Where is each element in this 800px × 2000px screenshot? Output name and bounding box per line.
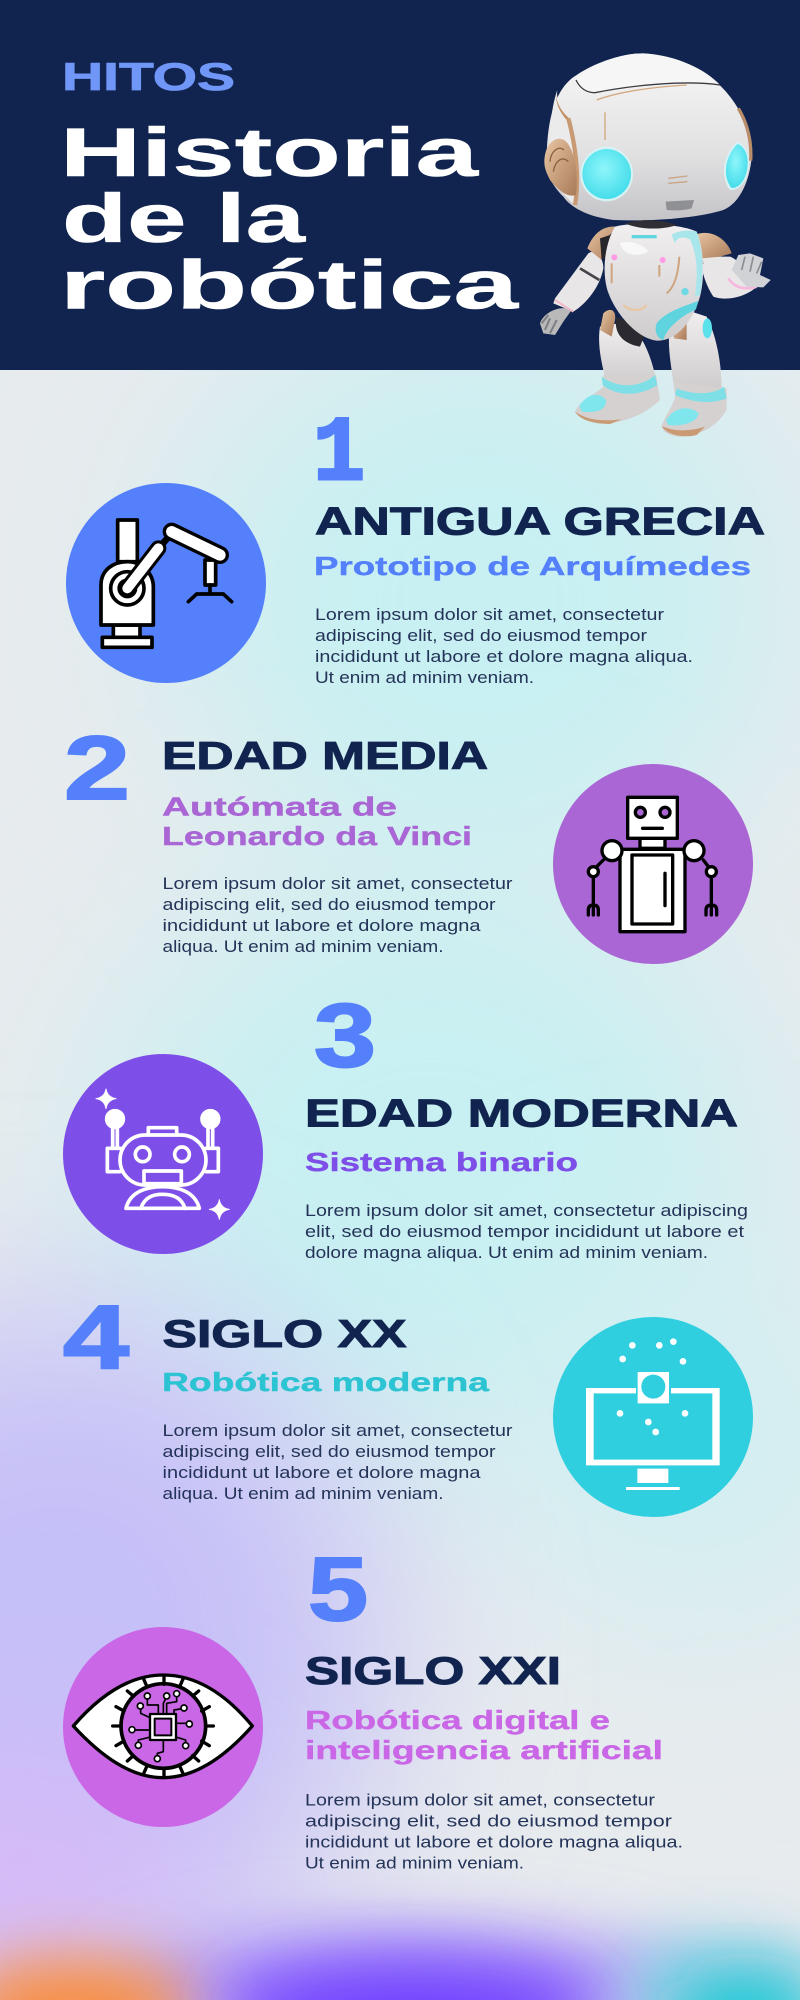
- section 5: Siglo XXI: [63, 1540, 683, 1872]
- body text: Ut enim ad minim veniam.: [305, 1854, 524, 1872]
- body text: incididunt ut labore et dolore magna: [162, 1464, 481, 1482]
- subheading: Robótica digital e: [305, 1705, 610, 1735]
- subheading: Prototipo de Arquímedes: [314, 551, 751, 581]
- subheading: inteligencia artificial: [305, 1735, 663, 1765]
- main title: [60, 114, 519, 324]
- number 4: 4: [63, 1288, 129, 1388]
- body text: dolore magna aliqua. Ut enim ad minim veniam.: [305, 1244, 708, 1262]
- main title: de la: [62, 180, 306, 257]
- heading: EDAD MEDIA: [162, 735, 488, 778]
- section 4: Siglo XX: [63, 1288, 753, 1517]
- body text: [305, 1202, 748, 1262]
- body text: incididunt ut labore et dolore magna: [162, 917, 481, 935]
- subheading: Sistema binario: [305, 1147, 578, 1177]
- body text: Ut enim ad minim veniam.: [315, 669, 534, 687]
- heading: SIGLO XX: [162, 1313, 406, 1356]
- number 1: 1: [313, 402, 365, 507]
- icon: robot with arms: [553, 764, 753, 964]
- body text: adipiscing elit, sed do eiusmod tempor: [162, 896, 496, 914]
- header eyebrow: HITOS: [62, 56, 235, 99]
- icon: eye with circuit: [63, 1627, 263, 1827]
- body text: Lorem ipsum dolor sit amet, consectetur: [162, 1422, 513, 1440]
- heading: ANTIGUA GRECIA: [315, 500, 765, 544]
- body text: Lorem ipsum dolor sit amet, consectetur adipiscing: [305, 1202, 748, 1220]
- body text: [305, 1792, 683, 1872]
- body text: adipiscing elit, sed do eiusmod tempor: [315, 627, 648, 645]
- body text: aliqua. Ut enim ad minim veniam.: [162, 938, 444, 956]
- header band: [0, 0, 800, 370]
- body text: aliqua. Ut enim ad minim veniam.: [162, 1485, 444, 1503]
- body text: [162, 1422, 513, 1503]
- body text: adipiscing elit, sed do eiusmod tempor: [305, 1812, 673, 1830]
- subheading: Autómata de: [162, 792, 397, 822]
- subheading: [305, 1705, 663, 1765]
- subheading: [162, 792, 472, 851]
- icon: robot head: [63, 1054, 263, 1254]
- body text: Lorem ipsum dolor sit amet, consectetur: [162, 875, 513, 893]
- body text: [315, 606, 693, 687]
- icon: robotic arm: [66, 483, 266, 683]
- body text: incididunt ut labore et dolore magna aliqua.: [305, 1834, 683, 1852]
- main title: robótica: [60, 246, 519, 324]
- number 5: 5: [308, 1540, 368, 1640]
- heading: SIGLO XXI: [305, 1650, 561, 1693]
- body text: [162, 875, 513, 956]
- heading: EDAD MODERNA: [305, 1092, 738, 1136]
- body text: adipiscing elit, sed do eiusmod tempor: [162, 1443, 496, 1461]
- body text: Lorem ipsum dolor sit amet, consectetur: [305, 1792, 656, 1810]
- number 3: 3: [314, 986, 376, 1086]
- icon: computer monitor: [553, 1317, 753, 1517]
- robot illustration: [540, 53, 771, 437]
- body text: elit, sed do eiusmod tempor incididunt ut labore et: [305, 1223, 744, 1241]
- subheading: Robótica moderna: [162, 1367, 490, 1397]
- section 1: Antigua Grecia: [66, 402, 765, 687]
- section 3: Edad Moderna: [63, 986, 748, 1262]
- subheading: Leonardo da Vinci: [162, 821, 472, 851]
- main title: Historia: [60, 114, 479, 191]
- body text: Lorem ipsum dolor sit amet, consectetur: [315, 606, 665, 624]
- section 2: Edad Media: [64, 719, 753, 964]
- body text: incididunt ut labore et dolore magna aliqua.: [315, 648, 693, 666]
- number 2: 2: [64, 719, 130, 819]
